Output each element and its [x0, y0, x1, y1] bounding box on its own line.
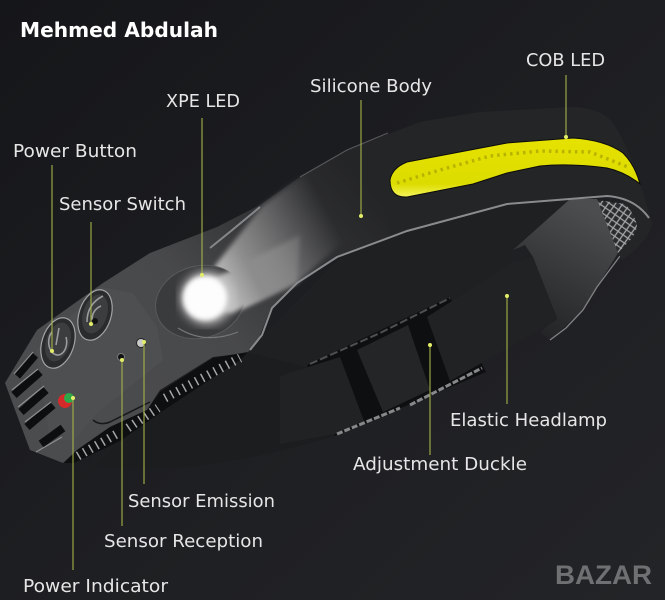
- XPE LED lamp: [147, 235, 300, 348]
- label: Silicone Body: Silicone Body: [310, 76, 432, 97]
- label: COB LED: COB LED: [526, 50, 605, 71]
- power indicator light: [58, 393, 74, 408]
- icon: sensor switch: [72, 285, 118, 345]
- watermark: BAZAR: [555, 560, 652, 590]
- side vent highlights: [12, 352, 62, 452]
- rear mesh: [597, 200, 638, 253]
- strap dark shade behind band: [247, 200, 570, 368]
- buckle: [280, 257, 557, 444]
- label: Power Button: Power Button: [13, 141, 137, 162]
- label: Sensor Switch: Sensor Switch: [59, 194, 186, 215]
- housing glint: [210, 207, 260, 248]
- panel notch line: [93, 402, 150, 424]
- headband body: [5, 107, 652, 463]
- label: Elastic Headlamp: Elastic Headlamp: [450, 410, 607, 431]
- leader dots: [50, 135, 568, 400]
- control panel: [36, 287, 163, 440]
- leader lines: [52, 75, 566, 570]
- label: Sensor Reception: Sensor Reception: [104, 531, 263, 552]
- light beam on housing: [203, 160, 345, 313]
- label: XPE LED: XPE LED: [166, 91, 240, 112]
- rear grey strap: [513, 199, 618, 340]
- side vents: [14, 355, 63, 444]
- title: Mehmed Abdulah: [20, 18, 218, 42]
- sensor emission window: [136, 338, 146, 348]
- COB LED strip: [390, 138, 640, 197]
- label: Sensor Emission: Sensor Emission: [128, 491, 275, 512]
- label: Adjustment Duckle: Adjustment Duckle: [353, 454, 527, 475]
- label: Power Indicator: Power Indicator: [23, 576, 169, 597]
- elastic strap under head: [95, 350, 362, 470]
- lower vents: [64, 352, 248, 463]
- sensor reception window: [118, 354, 124, 360]
- rear strap silver edge: [550, 256, 620, 340]
- band top edge highlight: [300, 133, 388, 177]
- icon: power button: [35, 313, 81, 373]
- band lower silver edge: [250, 196, 649, 350]
- band dark upper section: [380, 107, 652, 236]
